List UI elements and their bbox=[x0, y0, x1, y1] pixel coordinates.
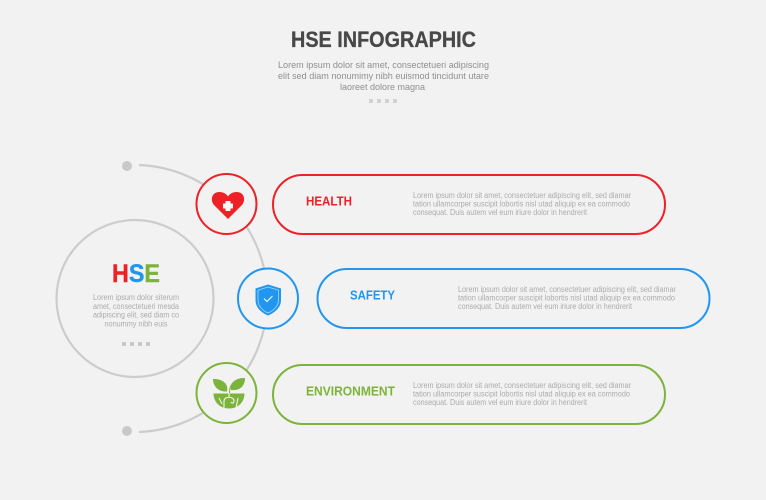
panel: health bbox=[273, 175, 665, 234]
safety text: tation ullamcorper suscipit lobortis nisl utad aliquip ex ea commodo bbox=[458, 294, 675, 302]
environment text bbox=[413, 381, 631, 407]
environment text: consequat. Duis autem vel eum iriure dolor in hendrerit bbox=[413, 398, 588, 407]
health text: tation ullamcorper suscipit lobortis nisl utad aliquip ex ea commodo bbox=[413, 200, 630, 208]
arc end dot bottom bbox=[122, 426, 132, 436]
main circle text bbox=[93, 293, 179, 328]
subtitle text: Lorem ipsum dolor sit amet, consectetueri adipiscing bbox=[278, 60, 489, 71]
health text: Lorem ipsum dolor sit amet, consectetuer adipiscing elit, sed diamar bbox=[413, 191, 631, 200]
safety text: consequat. Duis autem vel eum iriure dolor in hendrerit bbox=[458, 302, 633, 311]
safety label: SAFETY bbox=[350, 288, 396, 302]
panel: safety bbox=[318, 269, 710, 328]
main circle text: amet, consectetueri mesda bbox=[93, 302, 179, 311]
main circle text: Lorem ipsum dolor siterum bbox=[93, 293, 179, 302]
title: HSE INFOGRAPHIC bbox=[291, 27, 476, 52]
icon: plant in bowl bbox=[213, 378, 245, 408]
environment text: tation ullamcorper suscipit lobortis nisl utad aliquip ex ea commodo bbox=[413, 390, 630, 398]
health text bbox=[413, 191, 631, 217]
safety text bbox=[458, 285, 676, 311]
main circle text: adipiscing elit, sed diam co bbox=[93, 310, 179, 320]
main circle: HSE bbox=[56, 220, 214, 377]
node: environment icon bbox=[196, 363, 256, 423]
panel: environment bbox=[273, 365, 665, 424]
environment label: ENVIRONMENT bbox=[306, 384, 395, 398]
safety text: Lorem ipsum dolor sit amet, consectetuer adipiscing elit, sed diamar bbox=[458, 285, 676, 294]
icon: heart with cross bbox=[212, 192, 244, 219]
arc end dot top bbox=[122, 161, 132, 171]
environment text: Lorem ipsum dolor sit amet, consectetuer adipiscing elit, sed diamar bbox=[413, 381, 631, 390]
node: safety icon bbox=[238, 268, 298, 328]
connecting arc bbox=[139, 165, 267, 432]
health label: HEALTH bbox=[306, 194, 352, 208]
main circle text: nonummy nibh euis bbox=[104, 320, 168, 328]
main circle dots bbox=[122, 342, 150, 346]
node: health icon bbox=[196, 174, 256, 234]
HSE heading: HSE bbox=[112, 260, 160, 288]
icon: shield with check bbox=[256, 284, 281, 316]
title dots bbox=[369, 99, 397, 103]
health text: consequat. Duis autem vel eum iriure dolor in hendrerit bbox=[413, 208, 588, 217]
subtitle text bbox=[278, 60, 489, 93]
subtitle text: laoreet dolore magna bbox=[340, 82, 426, 93]
subtitle text: elit sed diam nonumimy nibh euismod tincidunt utare bbox=[278, 71, 489, 82]
